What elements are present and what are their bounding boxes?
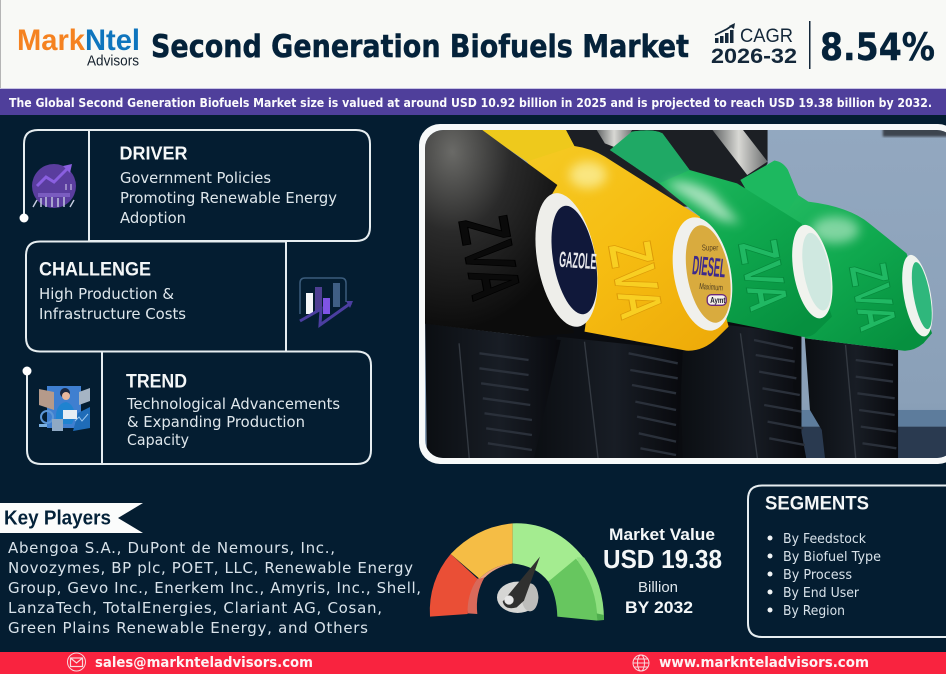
heading: SEGMENTS <box>765 494 869 514</box>
gauge hub <box>497 582 538 613</box>
text: Government Policies <box>120 169 271 187</box>
text: Capacity <box>127 431 189 449</box>
logo: Advisors <box>87 52 139 70</box>
ZVA marks <box>443 210 909 335</box>
icon: growth bars <box>715 23 735 43</box>
heading: TREND <box>126 372 187 392</box>
market value: Billion <box>638 579 678 596</box>
heading: CHALLENGE <box>39 260 151 280</box>
handle 2 <box>558 337 651 458</box>
icon: falling chart <box>300 278 353 325</box>
heading: DRIVER <box>120 142 188 164</box>
handle grooves <box>459 333 856 458</box>
market value <box>603 526 722 617</box>
summary band <box>0 88 946 115</box>
dot <box>20 214 28 222</box>
icon: policy growth <box>32 164 76 208</box>
text: High Production & <box>39 285 174 303</box>
list: By End User <box>783 586 860 601</box>
photo: fuel nozzles: Maximum <box>699 281 723 293</box>
handle ribs <box>479 340 896 455</box>
panel: driver <box>20 130 370 241</box>
icon: analyst <box>39 386 90 431</box>
lens: green 1 <box>792 224 832 318</box>
handle 4 <box>805 338 898 460</box>
yellow nozzle <box>500 130 728 351</box>
photo: fuel nozzles: GAZOLE <box>558 247 597 274</box>
photo: fuel nozzles: DIESEL <box>691 251 727 284</box>
photo: fuel nozzles <box>415 120 946 470</box>
list <box>768 532 881 619</box>
title: Second Generation Biofuels Market <box>151 29 689 65</box>
photo backdrop dark band <box>798 410 946 427</box>
key players list: Group, Gevo Inc., Enerkem Inc., Amyris, Inc., Shell, <box>8 579 421 597</box>
panel: challenge <box>26 242 353 352</box>
ZVA marks: ZVA <box>443 210 535 305</box>
photo: fuel nozzles: Aymt <box>710 295 726 305</box>
list: By Feedstock <box>783 532 866 547</box>
handle 3 <box>702 325 806 458</box>
black nozzle <box>425 130 562 336</box>
key players list: LanzaTech, TotalEnergies, Clariant AG, Cosan, <box>8 599 382 617</box>
text: Promoting Renewable Energy <box>120 189 337 207</box>
handle 1 <box>425 323 561 460</box>
text: Infrastructure Costs <box>39 305 186 323</box>
text: Technological Advancements <box>126 395 340 413</box>
dot <box>22 366 32 376</box>
dark pump backdrop <box>564 127 768 207</box>
header bar <box>0 0 946 89</box>
panel: segments <box>748 486 946 637</box>
text: Adoption <box>120 209 186 227</box>
CAGR block: 8.54% <box>820 26 935 69</box>
CAGR block <box>711 21 935 69</box>
text <box>39 285 186 323</box>
photo: fuel nozzles: Super <box>702 243 719 253</box>
key players banner <box>0 503 143 533</box>
ZVA marks: ZVA <box>595 236 677 323</box>
key players banner: Key Players <box>4 508 111 530</box>
green nozzle 2 <box>740 161 932 351</box>
steel tubes <box>596 130 632 147</box>
key players list: Abengoa S.A., DuPont de Nemours, Inc., <box>8 539 335 557</box>
market value: BY 2032 <box>625 598 693 617</box>
key players list: Novozymes, BP plc, POET, LLC, Renewable Energy <box>8 559 413 577</box>
website: www.marknteladvisors.com <box>659 655 869 671</box>
market value: Market Value <box>609 526 715 544</box>
text: & Expanding Production <box>127 413 305 431</box>
CAGR block: CAGR <box>740 26 793 47</box>
email: sales@marknteladvisors.com <box>95 655 313 671</box>
lens: gazole <box>535 193 598 327</box>
text <box>120 169 337 227</box>
icon: mail <box>68 653 86 671</box>
green nozzle 1 <box>610 130 832 337</box>
gauge needle <box>503 557 540 608</box>
list: By Process <box>783 568 852 583</box>
lens: diesel <box>672 217 732 331</box>
icon: globe <box>633 655 649 671</box>
footer bar <box>0 652 946 674</box>
list: By Biofuel Type <box>783 550 881 565</box>
CAGR block: 2026-32 <box>711 45 797 68</box>
text <box>126 395 340 449</box>
key players list <box>8 539 421 637</box>
lens: green 2 <box>902 254 933 336</box>
logo: MarkNtel <box>17 24 140 57</box>
ZVA marks: ZVA <box>837 259 909 335</box>
gauge <box>430 523 604 621</box>
market value: USD 19.38 <box>603 544 722 574</box>
list: By Region <box>783 604 845 619</box>
key players list: Green Plains Renewable Energy, and Others <box>8 619 368 637</box>
ZVA marks: ZVA <box>725 235 800 315</box>
panel: trend <box>22 352 371 464</box>
